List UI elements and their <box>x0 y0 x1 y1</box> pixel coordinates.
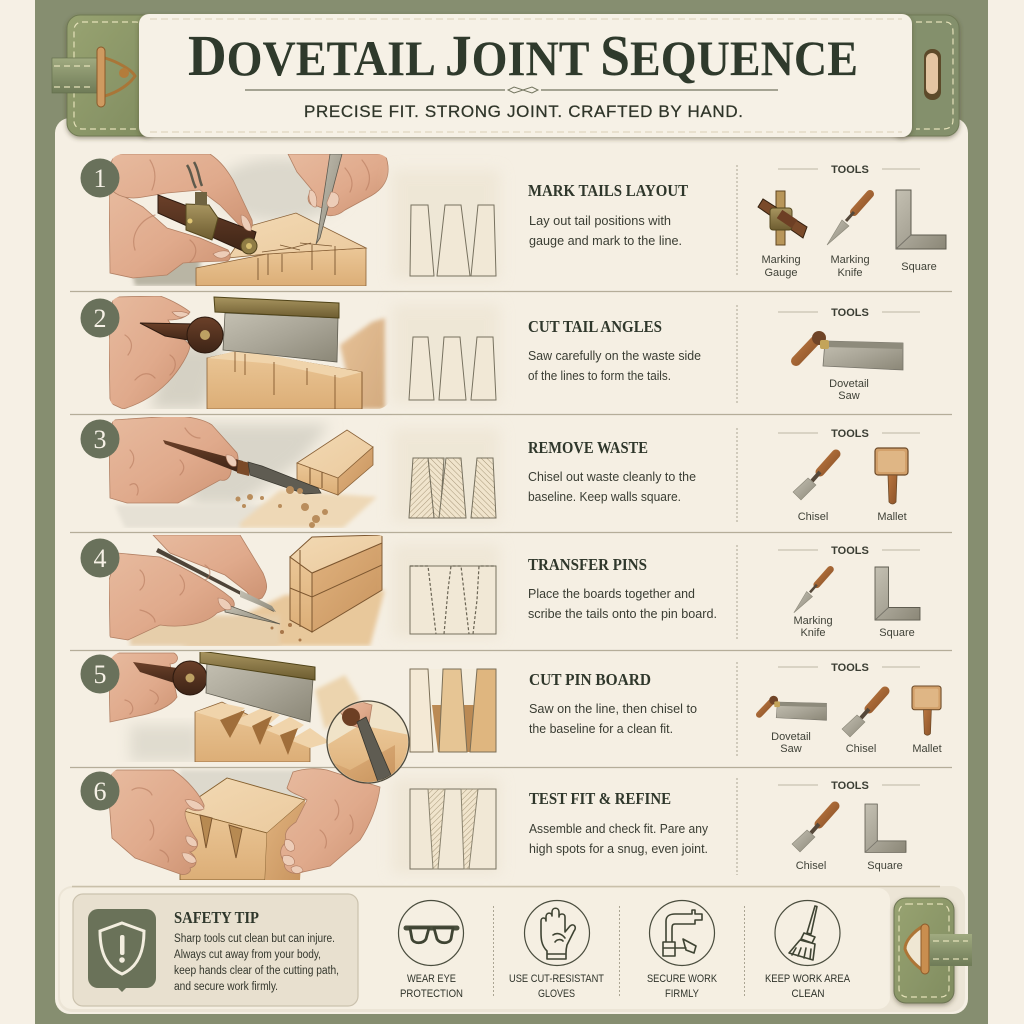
right header tab <box>890 15 959 136</box>
step 1 tools: Knife <box>837 267 863 279</box>
step 6 tools: TOOLS <box>831 780 869 792</box>
step 4 body: Place the boards together and <box>528 586 695 601</box>
safety body: and secure work firmly. <box>174 981 278 993</box>
step 5 tools: Chisel <box>846 743 876 755</box>
left header strap tab <box>52 15 155 136</box>
step 6 number badge: 6 <box>94 777 106 806</box>
step 1 tools: TOOLS <box>831 164 869 176</box>
safety body: Sharp tools cut clean but can injure. <box>174 933 335 945</box>
step 4 tools: Knife <box>800 627 826 639</box>
icon: square <box>896 190 946 249</box>
step 6 tools: Chisel <box>796 860 826 872</box>
step 1 tools: Marking <box>761 254 801 266</box>
panel: step 6 <box>80 768 920 880</box>
main paper panel <box>55 118 968 1014</box>
step 4 body: scribe the tails onto the pin board. <box>528 606 717 621</box>
icon: broom <box>775 900 840 966</box>
label: FIRMLY <box>665 988 700 1000</box>
step 1 tools: Marking <box>830 254 870 266</box>
step 1 tools: Square <box>901 261 937 273</box>
step 3 tools: TOOLS <box>831 428 869 440</box>
step 6 heading: TEST FIT & REFINE <box>529 789 671 808</box>
step 4 number badge: 4 <box>94 544 106 573</box>
header banner <box>139 14 912 137</box>
label: USE CUT-RESISTANT <box>509 973 604 985</box>
step 2 tools: Saw <box>838 390 860 402</box>
step 5 tools: TOOLS <box>831 662 869 674</box>
icon: warning shield <box>88 909 156 992</box>
step 3 tools <box>737 428 920 523</box>
label: WEAR EYE <box>407 973 456 985</box>
step 6 illustration: test fitting joint <box>109 768 391 880</box>
step 3 body: baseline. Keep walls square. <box>528 489 681 504</box>
step 5 tools: Dovetail <box>771 731 811 743</box>
panel: step 5 <box>80 651 942 785</box>
safety body: keep hands clear of the cutting path, <box>174 965 339 977</box>
step 3 number badge: 3 <box>94 425 106 454</box>
step 4 number badge <box>80 538 120 578</box>
icon: marking gauge <box>758 191 807 245</box>
step 2 tools <box>737 305 920 405</box>
panel: step 1 <box>80 154 946 286</box>
step 1 number badge <box>80 158 120 198</box>
step 2 tools: TOOLS <box>831 307 869 319</box>
step 4 dashed diagram <box>392 544 500 638</box>
step 5 tools: Saw <box>780 743 802 755</box>
panel: step 2 <box>80 296 920 409</box>
step 5 tools: Mallet <box>912 743 942 755</box>
step 2 tail diagram <box>392 304 500 404</box>
step 4 tools: Marking <box>793 615 833 627</box>
label: SECURE WORK <box>647 973 718 985</box>
step 1 number badge: 1 <box>94 164 106 193</box>
step 4 tools <box>737 545 920 640</box>
step 4 heading: TRANSFER PINS <box>528 555 647 574</box>
icon: chisel <box>842 691 885 737</box>
step 4 tools: Square <box>879 627 915 639</box>
step 5 illustration: sawing pin board with chisel inset <box>109 652 361 762</box>
step 1 illustration: marking gauge and knife <box>109 154 391 286</box>
step 1 tail diagram <box>392 170 500 280</box>
step 3 heading: REMOVE WASTE <box>528 438 648 457</box>
step 4 tools: TOOLS <box>831 545 869 557</box>
step 5 body: Saw on the line, then chisel to <box>529 701 697 716</box>
title ornament divider <box>245 87 778 93</box>
icon: chisel <box>793 454 836 500</box>
step 5 body: the baseline for a clean fit. <box>529 721 673 736</box>
step 3 hatched diagram <box>392 428 500 523</box>
step 5 number badge <box>80 654 120 694</box>
step 5 number badge: 5 <box>94 660 106 689</box>
step 2 number badge <box>80 298 120 338</box>
icon: chisel <box>792 806 835 852</box>
title: DOVETAIL JOINT SEQUENCE <box>188 23 858 88</box>
step 5 colour diagram <box>410 669 496 752</box>
safety tip card <box>73 894 358 1006</box>
step 3 body: Chisel out waste cleanly to the <box>528 469 696 484</box>
step 3 illustration: chiselling waste <box>109 416 391 528</box>
safety heading: SAFETY TIP <box>174 908 259 927</box>
safety body: Always cut away from your body, <box>174 949 321 961</box>
panel: safety strip <box>58 886 965 1012</box>
bottom-right strap and buckle <box>894 898 972 1003</box>
icon: safety goggles <box>398 900 464 966</box>
icon: dovetail saw <box>759 696 827 720</box>
icon: cut-resistant glove <box>524 900 590 966</box>
step 3 number badge <box>80 420 120 458</box>
step 6 fit diagram <box>392 778 500 874</box>
step 2 heading: CUT TAIL ANGLES <box>528 317 662 336</box>
panel: step 4 <box>80 535 920 646</box>
step 6 number badge <box>80 772 120 810</box>
step 1 body: gauge and mark to the line. <box>529 233 682 248</box>
step 1 heading: MARK TAILS LAYOUT <box>528 181 688 200</box>
step 6 body: Assemble and check fit. Pare any <box>529 821 708 836</box>
chisel detail inset <box>327 700 410 785</box>
step 2 tools: Dovetail <box>829 378 869 390</box>
step 2 body: Saw carefully on the waste side <box>528 348 701 363</box>
step 2 number badge: 2 <box>94 304 106 333</box>
icon: marking knife <box>827 194 870 245</box>
step 1 tools: Gauge <box>764 267 798 279</box>
step 3 tools: Mallet <box>877 511 907 523</box>
step 1 tools <box>737 164 946 279</box>
icon: clamp <box>650 900 714 966</box>
icon: square <box>865 804 906 852</box>
step 4 illustration: transferring pins <box>109 535 391 646</box>
step 5 heading: CUT PIN BOARD <box>529 670 651 689</box>
step 6 tools <box>737 778 920 875</box>
label: CLEAN <box>792 988 825 1000</box>
label: GLOVES <box>538 988 575 1000</box>
step 1 body: Lay out tail positions with <box>529 213 671 228</box>
panel: step 3 <box>80 416 920 528</box>
subtitle: PRECISE FIT. STRONG JOINT. CRAFTED BY HAND. <box>304 102 743 121</box>
icon: square <box>875 567 920 620</box>
step 6 body: high spots for a snug, even joint. <box>529 841 708 856</box>
step 6 tools: Square <box>867 860 903 872</box>
icon: marking knife <box>794 569 830 613</box>
icon: dovetail saw <box>796 331 903 370</box>
step 5 tools <box>737 662 942 757</box>
step 2 body: of the lines to form the tails. <box>528 368 671 383</box>
icon: mallet <box>875 448 908 504</box>
icon: mallet <box>912 686 941 735</box>
step 3 tools: Chisel <box>798 511 828 523</box>
label: PROTECTION <box>400 988 463 1000</box>
step 2 illustration: sawing tails <box>109 296 391 409</box>
label: KEEP WORK AREA <box>765 973 851 985</box>
